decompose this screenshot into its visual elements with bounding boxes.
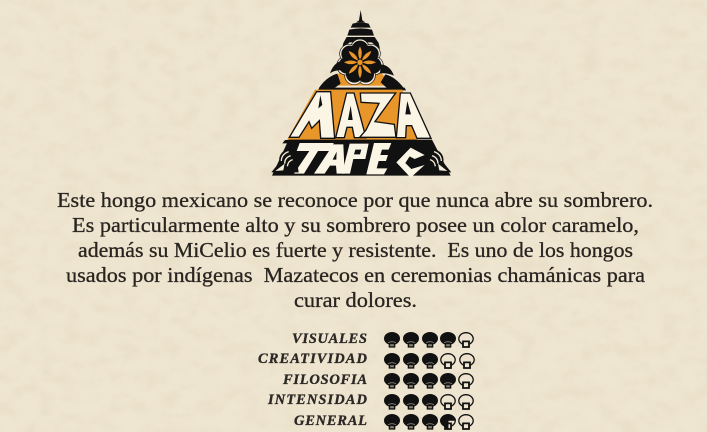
logo: MAZA band <box>282 90 431 143</box>
letter A <box>396 93 431 138</box>
logo: plant <box>342 10 380 49</box>
letter E <box>366 143 391 174</box>
logo: side leaves <box>319 61 404 88</box>
logo: right ornament <box>424 150 451 172</box>
letter A <box>336 93 366 138</box>
rating: intensidad: INTENSIDAD <box>267 392 368 408</box>
letter P <box>342 144 369 174</box>
logo: MAZA lettering <box>289 92 431 138</box>
rating: intensidad <box>267 392 473 409</box>
logo: black band <box>272 140 451 176</box>
rating: visuales <box>292 331 473 347</box>
logo: lower edge bar <box>282 140 428 143</box>
rating: general <box>294 413 473 430</box>
logo: top plant and flower <box>318 10 406 90</box>
letter M <box>289 92 335 138</box>
description paragraph: Es particularmente alto y su sombrero posee un color caramelo, <box>72 213 639 237</box>
logo: TAPEC band <box>271 140 451 178</box>
logo: left ornament <box>271 150 299 172</box>
description paragraph: además su MiCelio es fuerte y resistente. Es uno de los hongos <box>78 238 633 262</box>
logo: letter details <box>318 95 411 120</box>
letter A <box>314 144 345 174</box>
letter Z <box>360 93 396 137</box>
rating: creatividad <box>258 351 474 368</box>
logo: flower <box>337 39 383 85</box>
description paragraph: usados por indígenas Mazatecos en ceremonias chamánicas para <box>66 263 645 287</box>
logo: upper black bar <box>318 88 406 90</box>
rating: visuales: VISUALES <box>292 331 367 347</box>
rating: general: GENERAL <box>294 413 367 429</box>
rating: creatividad: CREATIVIDAD <box>258 351 368 367</box>
description paragraph <box>57 188 653 312</box>
logo: orange field <box>287 90 418 140</box>
logo: Mazatepec triangle <box>271 10 451 178</box>
letter T <box>294 143 334 174</box>
ratings table <box>258 331 474 430</box>
rating: filosofia: FILOSOFIA <box>282 372 367 388</box>
description paragraph: Este hongo mexicano se reconoce por que nunca abre su sombrero. <box>57 188 653 212</box>
rating: filosofia <box>282 372 473 388</box>
letter C <box>396 148 425 178</box>
logo: orange base under flower <box>331 72 393 86</box>
logo: TAPEC lettering <box>294 143 425 178</box>
description paragraph: curar dolores. <box>294 288 417 312</box>
